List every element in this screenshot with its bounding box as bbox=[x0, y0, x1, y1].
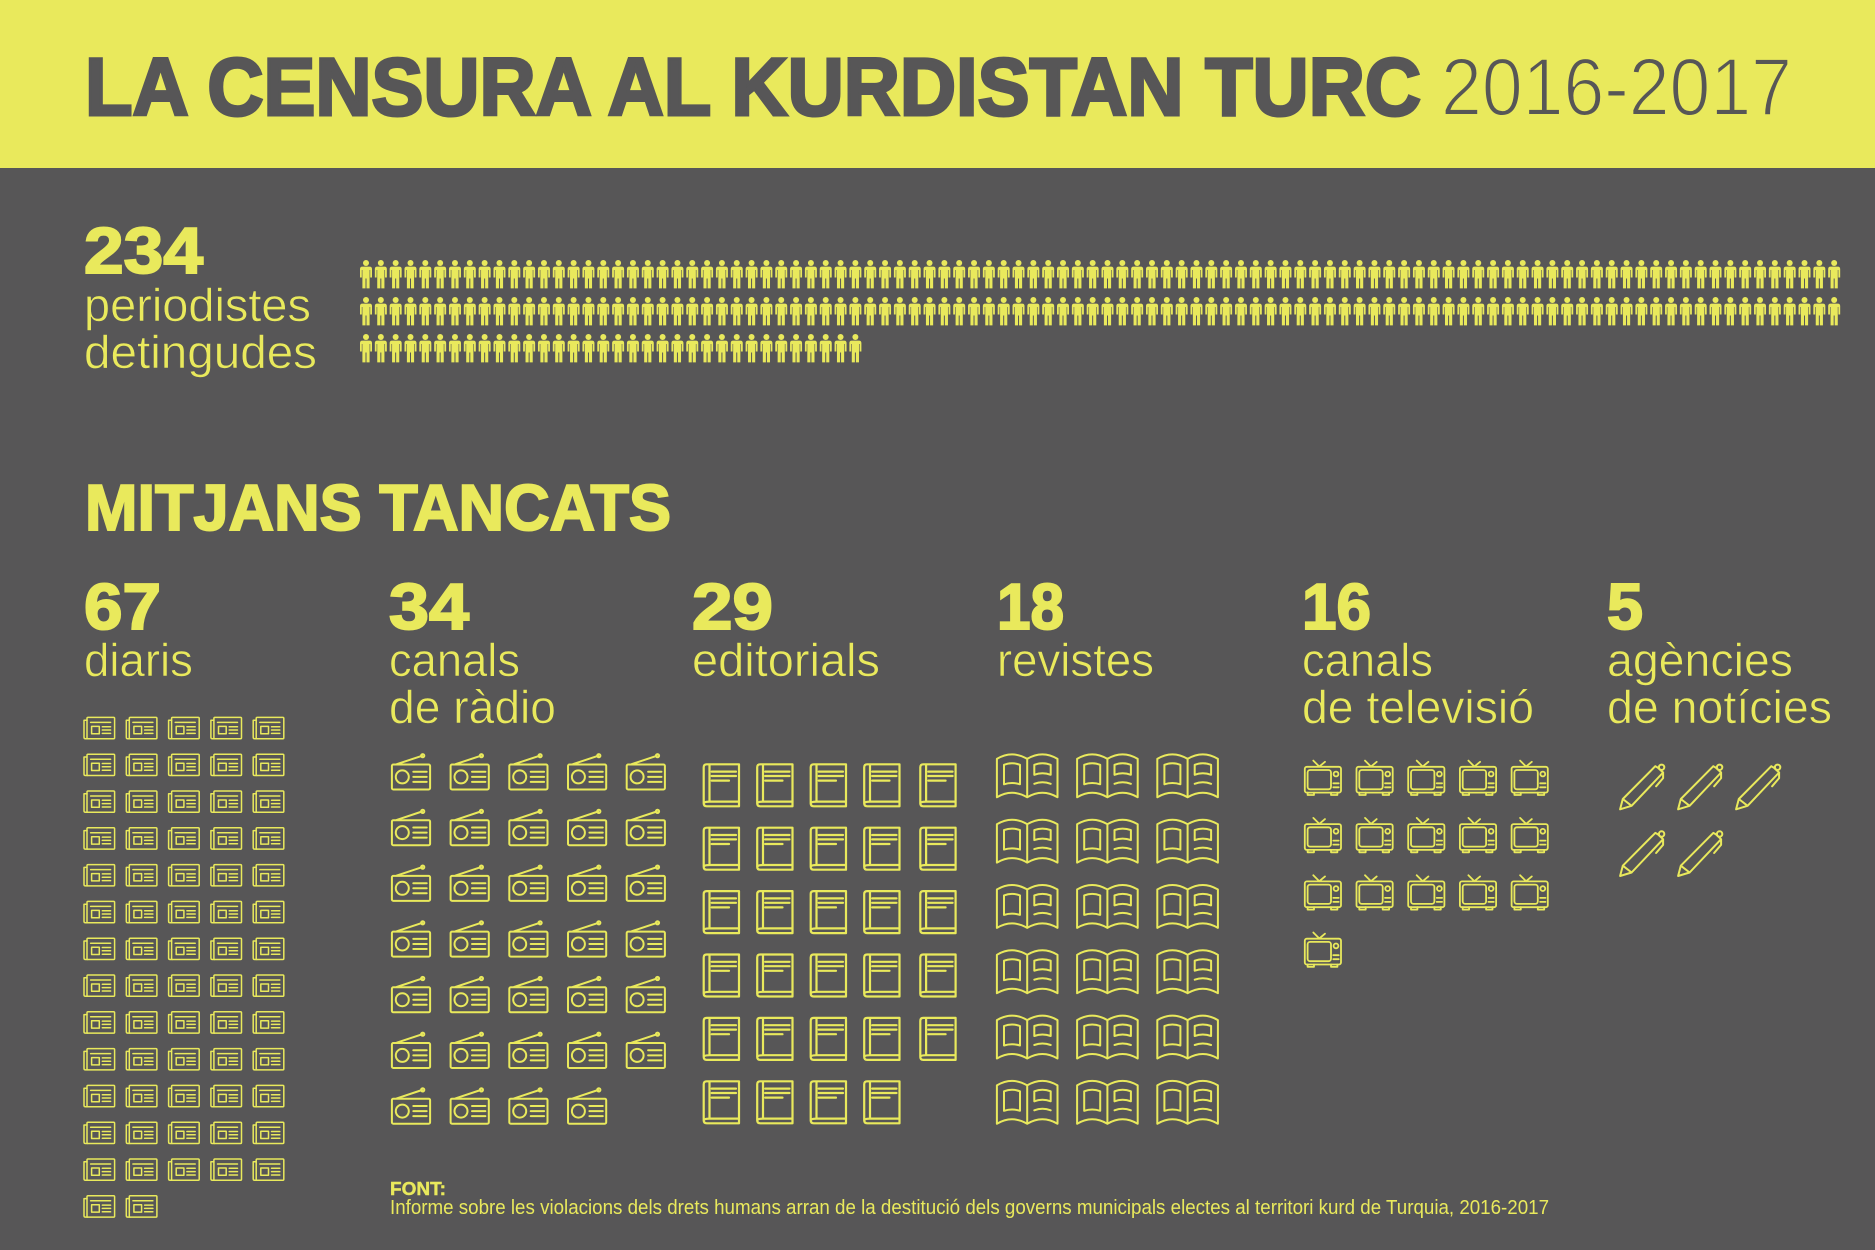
column: magazines bbox=[997, 570, 1218, 1124]
column: magazines: 18 bbox=[997, 570, 1064, 643]
column: radio channels: de ràdio bbox=[389, 681, 556, 733]
column: publishers bbox=[692, 570, 956, 1123]
column: TV channels bbox=[1302, 570, 1548, 967]
column: publishers: 29 bbox=[692, 570, 773, 643]
pictogram: 234 people bbox=[360, 260, 1840, 362]
icons: 29 books bbox=[704, 764, 956, 1123]
stat: journalists detained bbox=[84, 214, 317, 378]
source note: Informe sobre les violacions dels drets humans arran de la destitució dels governs municipals electes al territori kurd de Turquia, 2016-2017 bbox=[390, 1197, 1549, 1219]
column: TV channels: 16 bbox=[1302, 570, 1371, 643]
stat: journalists detained: detingudes bbox=[84, 326, 317, 378]
column: news agencies bbox=[1607, 570, 1832, 876]
column: newspapers bbox=[84, 570, 284, 1217]
column: radio channels: canals bbox=[389, 634, 520, 686]
column: newspapers: diaris bbox=[84, 634, 193, 686]
icons: 5 pens bbox=[1620, 765, 1780, 876]
column: news agencies: 5 bbox=[1607, 570, 1643, 643]
stat: journalists detained: periodistes bbox=[84, 279, 311, 331]
title: LA CENSURA AL KURDISTAN TURC bbox=[85, 42, 1421, 133]
icons: 18 magazines bbox=[997, 754, 1218, 1124]
header band bbox=[0, 0, 1875, 168]
source note: FONT: bbox=[390, 1179, 446, 1199]
icons: 16 televisions bbox=[1305, 761, 1548, 967]
icons: 34 radios bbox=[392, 754, 665, 1124]
source note bbox=[390, 1179, 1549, 1219]
column: TV channels: canals bbox=[1302, 634, 1433, 686]
heading: closed media: MITJANS TANCATS bbox=[85, 471, 671, 544]
column: magazines: revistes bbox=[997, 634, 1154, 686]
column: news agencies: agències bbox=[1607, 634, 1793, 686]
icons: 67 newspapers bbox=[84, 717, 284, 1217]
title: 2016-2017 bbox=[1441, 42, 1792, 133]
column: publishers: editorials bbox=[692, 634, 880, 686]
stat: journalists detained: 234 bbox=[84, 214, 203, 287]
column: radio channels: 34 bbox=[389, 570, 469, 643]
column: newspapers: 67 bbox=[84, 570, 161, 643]
column: radio channels bbox=[389, 570, 665, 1124]
column: news agencies: de notícies bbox=[1607, 681, 1832, 733]
column: TV channels: de televisió bbox=[1302, 681, 1534, 733]
